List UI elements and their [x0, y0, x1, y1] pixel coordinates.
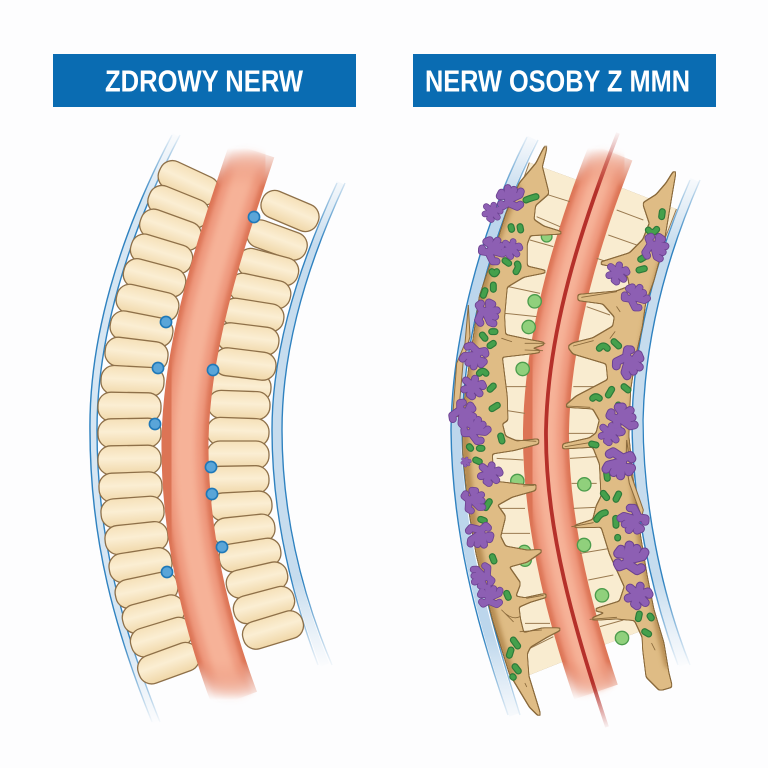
tan outer-edge shading: [463, 188, 670, 677]
right sheath: [632, 180, 700, 665]
zoomed drawing layer: Schwann cell overgrowth and deposits: [451, 140, 676, 722]
myelin capsules, left column: [98, 156, 223, 688]
exposed cells, right band: [591, 198, 648, 637]
tan overgrowth, right: [563, 168, 676, 690]
finger slits and veins: [502, 234, 655, 687]
purple protein clusters: [451, 188, 667, 606]
right sheath: [272, 183, 345, 665]
panel: MMN nerve: [451, 133, 700, 727]
green cell circles: [511, 231, 629, 645]
tan overgrowth, left: [463, 140, 565, 722]
left sheath: [451, 137, 538, 715]
heading: healthy nerve: [53, 54, 356, 107]
green deposits: [469, 197, 662, 677]
cell dividers: [495, 193, 643, 648]
panel: healthy nerve: [90, 135, 345, 722]
damaged axon: [546, 133, 618, 727]
myelin capsules, right column: [207, 186, 323, 652]
heading: nerve of a person with MMN: [413, 54, 716, 107]
heading: nerve of a person with MMN: NERW OSOBY Z MMN: [425, 64, 690, 98]
blue node dots: [149, 211, 260, 578]
detached tan slivers: [453, 305, 643, 517]
red central line: [546, 133, 618, 727]
heading: healthy nerve: ZDROWY NERW: [105, 64, 304, 98]
exposed cells, left band: [501, 173, 558, 668]
axon: [185, 150, 252, 700]
left sheath: [90, 135, 180, 722]
